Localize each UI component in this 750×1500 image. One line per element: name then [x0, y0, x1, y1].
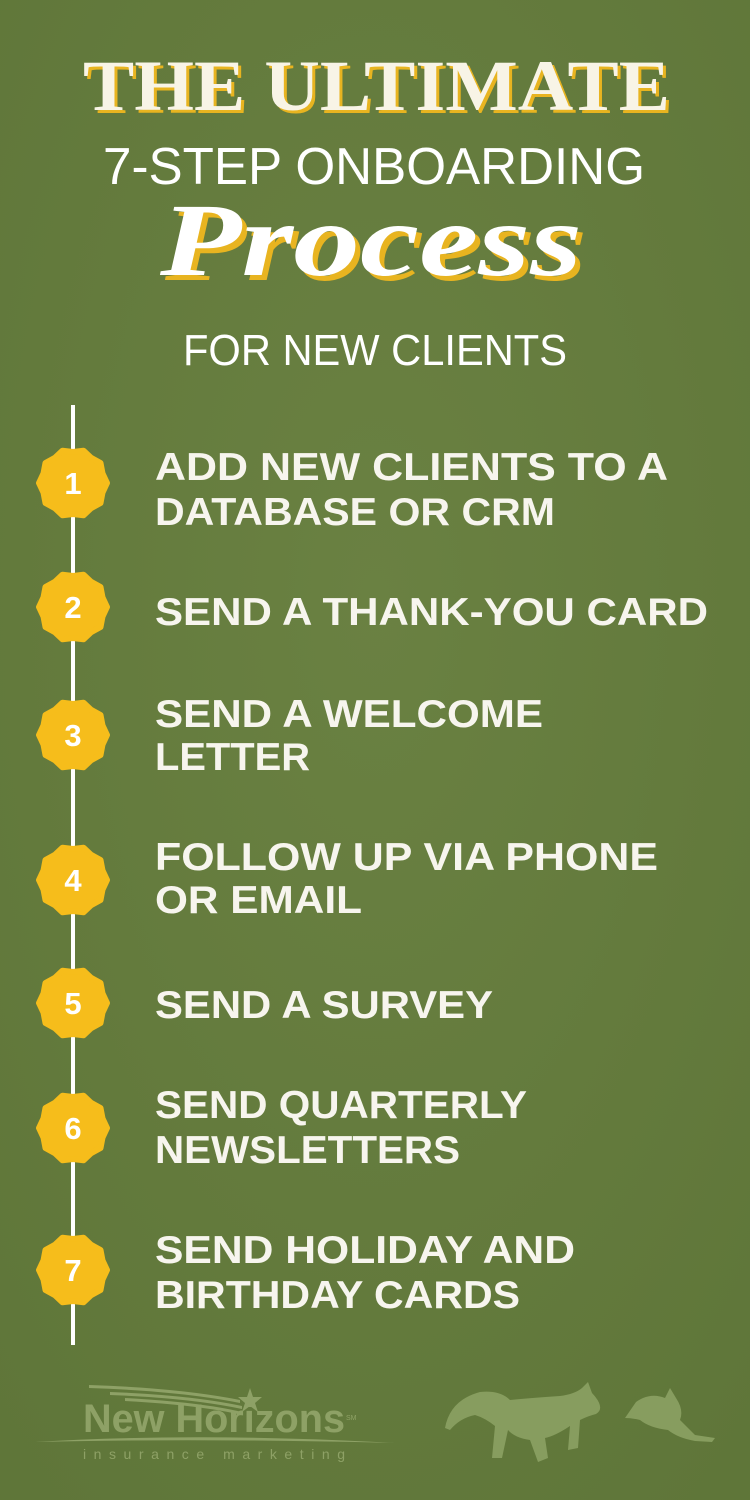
step 1: [39, 446, 668, 534]
step 1: 1: [64, 466, 82, 501]
step 7: 7: [64, 1253, 82, 1288]
step 5: SEND A SURVEY: [155, 984, 493, 1027]
step 2: 2: [64, 590, 82, 625]
subtitle: for new clients: FOR NEW CLIENTS: [183, 326, 567, 375]
step 6: SEND QUARTERLY: [155, 1084, 527, 1127]
step 4: FOLLOW UP VIA PHONE: [155, 836, 658, 879]
step 2: SEND A THANK-YOU CARD: [155, 591, 708, 634]
step 7: SEND HOLIDAY AND: [155, 1229, 575, 1272]
step 3: [39, 693, 543, 779]
step 2: [39, 575, 708, 639]
step 7: BIRTHDAY CARDS: [155, 1274, 520, 1317]
step 1: ADD NEW CLIENTS TO A: [155, 446, 668, 489]
step 4: [39, 836, 658, 922]
step 6: NEWSLETTERS: [155, 1129, 460, 1172]
subtitle: 7-step onboarding: 7-STEP ONBOARDING: [103, 138, 645, 196]
step 4: 4: [64, 863, 82, 898]
logo: New Horizons: New Horizons: [83, 1397, 345, 1441]
step 3: LETTER: [155, 736, 310, 779]
icon: fox and hare: [445, 1382, 715, 1462]
step 7: [39, 1229, 575, 1317]
step 6: 6: [64, 1111, 82, 1146]
logo: New Horizons: SM: [346, 1415, 357, 1422]
logo: New Horizons: insurance marketing: [83, 1446, 345, 1462]
step 4: OR EMAIL: [155, 879, 362, 922]
title: THE ULTIMATE: THE ULTIMATE: [86, 49, 673, 129]
step 6: [39, 1084, 527, 1172]
title: THE ULTIMATE: THE ULTIMATE: [83, 46, 670, 126]
logo: New Horizons: [35, 1385, 395, 1462]
title script: Process: Process: [164, 188, 587, 303]
step 3: 3: [64, 718, 82, 753]
step 1: DATABASE OR CRM: [155, 491, 555, 534]
title script: Process: Process: [159, 183, 582, 298]
steps list: [39, 446, 708, 1317]
step 5: [39, 971, 493, 1035]
step 5: 5: [64, 986, 82, 1021]
step 3: SEND A WELCOME: [155, 693, 543, 736]
timeline line: [71, 405, 75, 1345]
